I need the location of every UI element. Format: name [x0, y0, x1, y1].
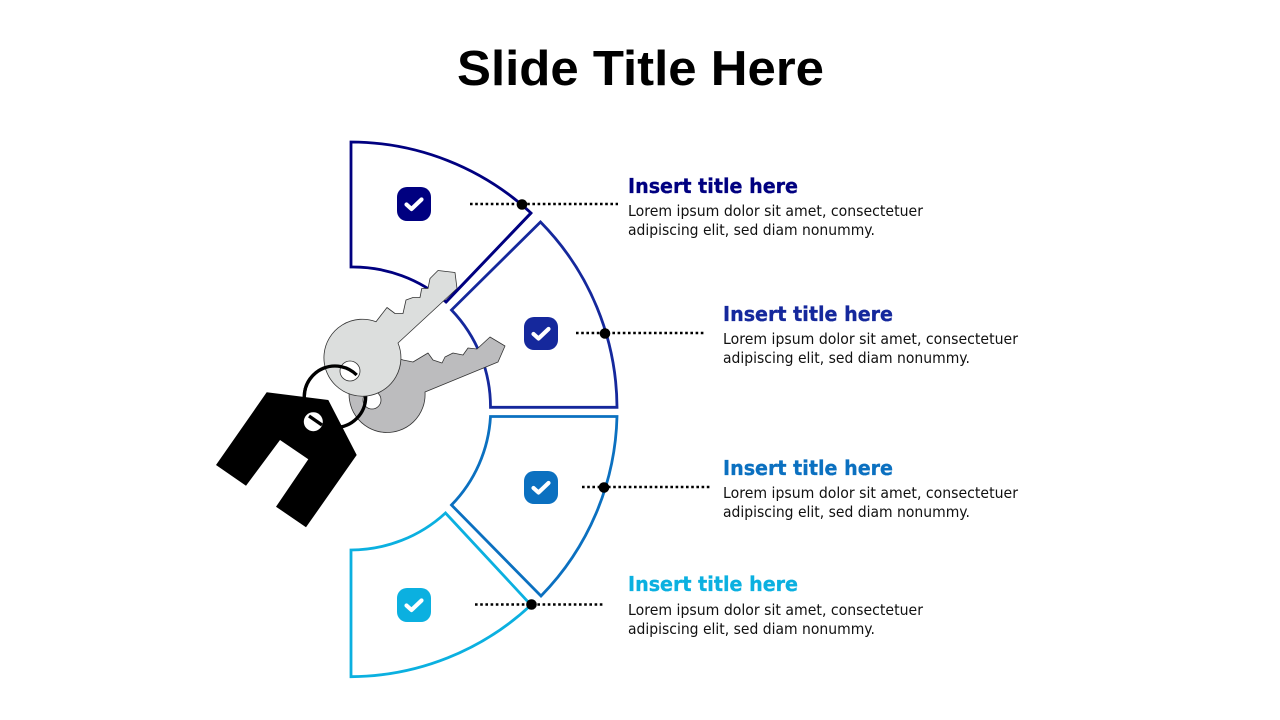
text block 2: Insert title here: [723, 302, 893, 326]
text block 3: Lorem ipsum dolor sit amet, consectetuer: [723, 484, 1019, 502]
segment 4 outline: [351, 513, 531, 677]
connector dot 1: [517, 199, 527, 210]
text block 1: Lorem ipsum dolor sit amet, consectetuer: [628, 202, 924, 220]
segment 1 outline: [351, 142, 531, 302]
text block 1: Insert title here: [628, 174, 798, 198]
panel: segment 3: [452, 416, 1019, 596]
connector dot 4: [526, 599, 537, 610]
text block 4: [628, 572, 924, 638]
panel: segment 1: [351, 142, 924, 302]
segment 2 outline: [452, 222, 617, 407]
text block 2: Lorem ipsum dolor sit amet, consectetuer: [723, 330, 1019, 348]
connector 1: [470, 203, 618, 205]
segment 3 outline: [452, 416, 617, 596]
connector 3: [582, 486, 712, 488]
text block 3: [723, 456, 1019, 521]
panel: segment 2: [452, 222, 1019, 407]
icon: checkbox 4: [397, 588, 431, 622]
text block 4: Insert title here: [628, 572, 798, 596]
key ring: [304, 366, 366, 427]
connector dot 3: [599, 482, 609, 493]
icon: checkbox 2: [524, 317, 558, 350]
text block 1: adipiscing elit, sed diam nonummy.: [628, 221, 875, 239]
text block 4: adipiscing elit, sed diam nonummy.: [628, 620, 875, 638]
connector 2: [576, 332, 706, 334]
text block 4: Lorem ipsum dolor sit amet, consectetuer: [628, 601, 924, 619]
ring front arc: [304, 366, 357, 397]
text block 3: Insert title here: [723, 456, 893, 480]
title: Slide Title Here: [457, 42, 824, 96]
tag hole: [304, 412, 323, 431]
connector 4: [475, 603, 605, 606]
light grey key: [324, 270, 457, 396]
text block 2: [723, 302, 1019, 367]
dark grey key: [349, 337, 505, 433]
house tag: [216, 392, 357, 527]
connector dot 2: [600, 328, 610, 339]
icon: checkbox 3: [524, 471, 558, 504]
icon: house keys on a ring: [216, 270, 505, 527]
text block 3: adipiscing elit, sed diam nonummy.: [723, 503, 970, 521]
icon: checkbox 1: [397, 187, 431, 221]
text block 1: [628, 174, 924, 239]
panel: segment 4: [351, 513, 924, 677]
text block 2: adipiscing elit, sed diam nonummy.: [723, 349, 970, 367]
